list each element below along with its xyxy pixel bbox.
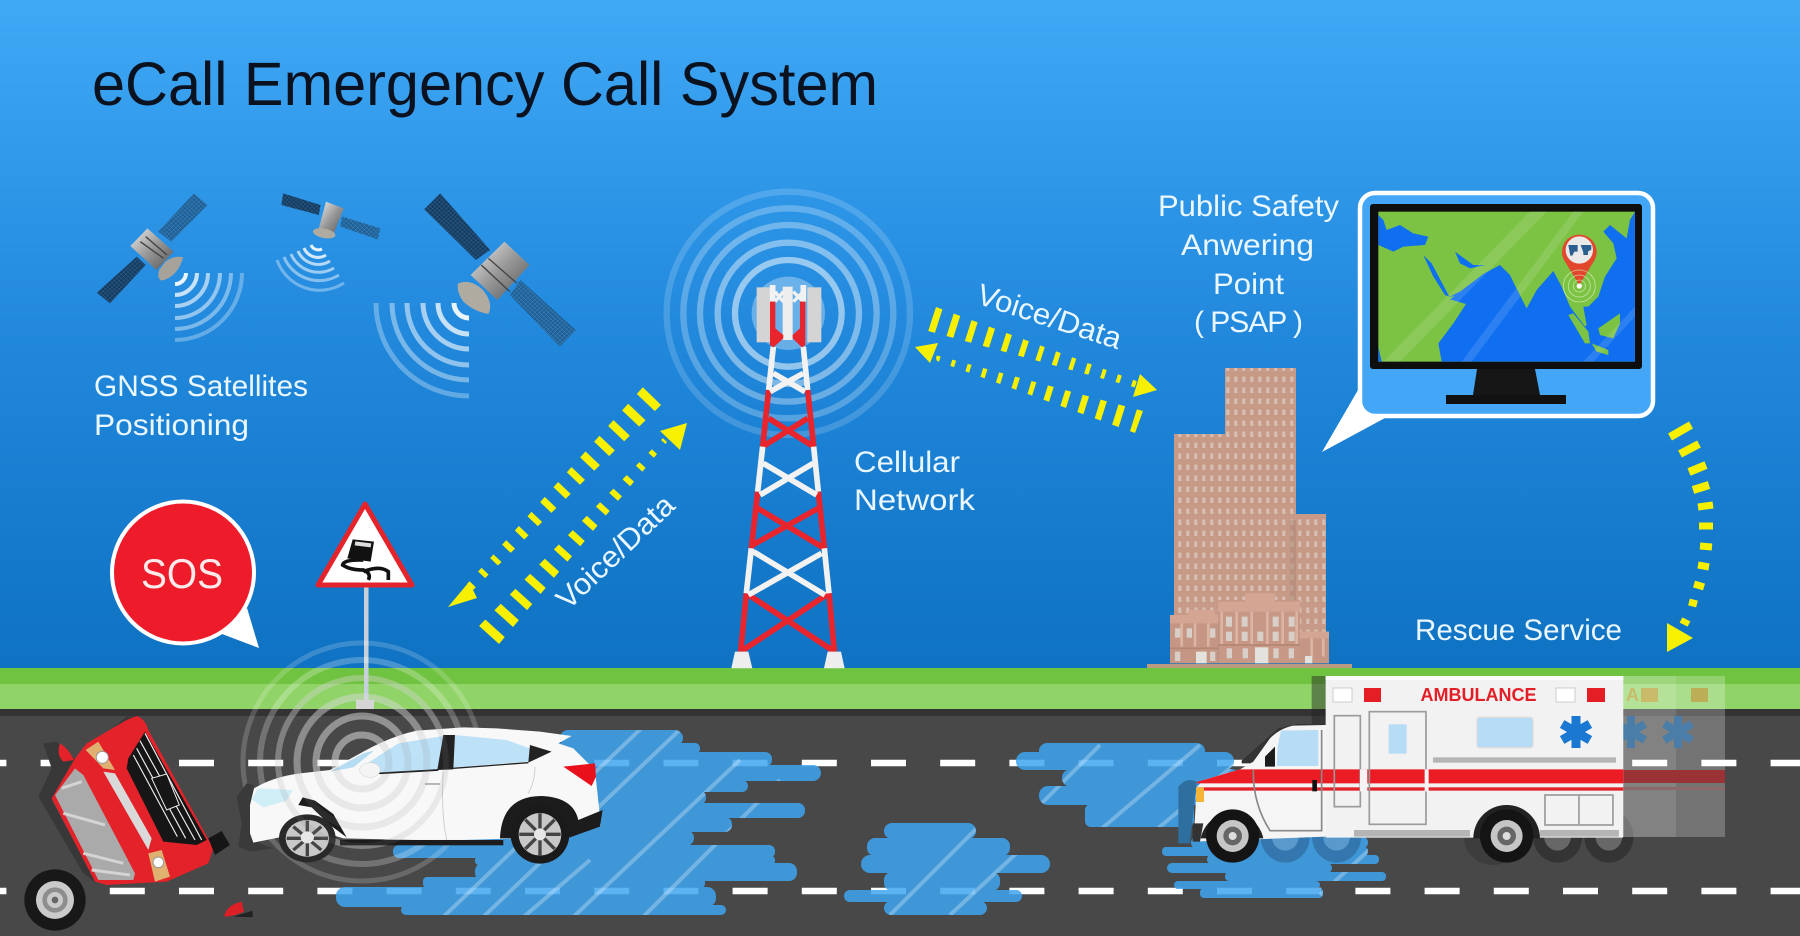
monitor <box>1370 204 1642 404</box>
road sign <box>318 504 412 709</box>
label: PSAP: Public Safety <box>1158 190 1339 223</box>
icon: satellite 2 <box>281 193 380 240</box>
podium <box>1170 593 1329 663</box>
label: Cellular Network: Network <box>854 484 976 517</box>
cell tower <box>667 192 910 668</box>
world map <box>1378 212 1635 362</box>
building <box>1147 368 1352 668</box>
label: PSAP <box>1158 190 1339 339</box>
arrow: PSAP to tower <box>915 343 1140 422</box>
label: GNSS: GNSS Satellites <box>94 370 308 403</box>
tower head red brackets <box>770 302 805 347</box>
label: Voice/Data upper: Voice/Data <box>973 278 1126 356</box>
red car wheel <box>24 869 86 931</box>
ambulance <box>1178 676 1725 865</box>
label: GNSS <box>94 370 308 442</box>
road <box>0 709 1800 936</box>
faint signal rings over car <box>278 678 446 846</box>
front wheel <box>1206 809 1259 863</box>
debris <box>224 902 253 917</box>
signal waves satellite 2 <box>277 245 344 290</box>
arrow: tower to car <box>489 423 687 635</box>
water puddles <box>336 730 1386 915</box>
signal rings at crash <box>243 643 481 881</box>
rear wheel <box>1480 809 1533 863</box>
title: eCall Emergency Call System <box>92 50 878 118</box>
ambulance body <box>1178 676 1623 863</box>
rear wheel <box>511 805 569 864</box>
tower feet <box>731 652 845 668</box>
arrow: tower to PSAP <box>932 319 1157 397</box>
label: Voice/Data lower: Voice/Data <box>550 489 682 616</box>
label: PSAP: Anwering <box>1181 229 1314 262</box>
label: PSAP: Point <box>1213 268 1285 301</box>
sky background <box>0 0 1800 668</box>
label: Cellular Network <box>854 446 976 517</box>
icon: location pin <box>1562 235 1597 302</box>
icon: slippery car <box>343 539 388 580</box>
ghost motion trail: A <box>1626 685 1639 705</box>
antennas <box>757 287 821 342</box>
label: PSAP: ( PSAP ) <box>1194 306 1303 339</box>
overturned red car <box>24 716 253 931</box>
callout bubble <box>1322 193 1653 452</box>
ambulance lettering: AMBULANCE <box>1420 685 1536 705</box>
grass verge <box>0 668 1800 709</box>
callout: monitor <box>1322 193 1653 452</box>
icon: satellite 1 <box>97 193 207 303</box>
SOS bubble <box>112 502 259 648</box>
ghost motion trail <box>1261 676 1725 865</box>
icon: star of life <box>1560 716 1592 748</box>
arrow: PSAP to rescue <box>1667 425 1713 652</box>
SOS bubble: SOS <box>141 550 223 597</box>
ambulance top lights <box>1333 688 1605 702</box>
label: GNSS: Positioning <box>94 409 249 442</box>
arrow: car to tower <box>448 396 652 607</box>
label: Cellular Network: Cellular <box>854 446 960 479</box>
satellites <box>97 193 576 396</box>
signal rings <box>667 192 910 435</box>
white car <box>237 727 603 864</box>
front wheel <box>279 814 336 862</box>
icon: satellite 3 <box>424 193 576 347</box>
signal waves satellite 1 <box>175 273 242 340</box>
tower legs and bracing <box>741 285 834 652</box>
signal waves satellite 3 <box>376 303 469 396</box>
label: Rescue Service: Rescue Service <box>1415 614 1622 647</box>
